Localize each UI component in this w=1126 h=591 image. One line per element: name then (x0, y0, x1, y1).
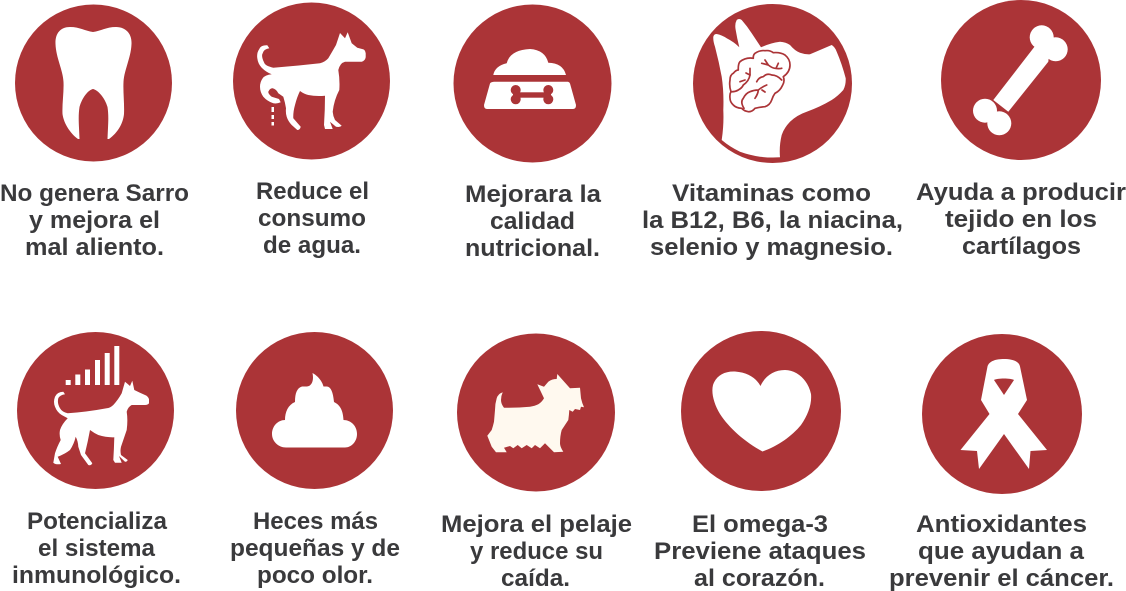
caption: tartar and breath: No genera Sarro (0, 180, 189, 207)
caption: heart health (654, 511, 866, 591)
icon: food bowl (454, 4, 612, 162)
caption: heart health: Previene ataques (654, 538, 866, 565)
caption: nutrition (465, 181, 601, 262)
caption: water consumption: Reduce el (256, 178, 369, 205)
caption: water consumption (256, 178, 369, 259)
caption: water consumption: de agua. (263, 232, 361, 259)
caption: water consumption: consumo (258, 205, 366, 232)
caption: immune system (12, 508, 181, 589)
caption: stool: poco olor. (257, 562, 373, 589)
caption: heart health: El omega-3 (692, 511, 828, 538)
icon: awareness ribbon (922, 334, 1082, 494)
caption: vitamins: selenio y magnesio. (650, 234, 893, 261)
caption: nutrition: calidad (490, 208, 575, 235)
caption: stool: Heces más (253, 508, 378, 535)
caption: cartilage: tejido en los (945, 206, 1097, 233)
icon: tooth (15, 4, 172, 162)
caption: antioxidants (889, 511, 1114, 591)
icon: dog urinating (233, 2, 390, 160)
panel: heart health (654, 331, 866, 591)
caption: immune system: Potencializa (27, 508, 167, 535)
icon: stool (236, 332, 393, 489)
caption: nutrition: Mejorara la (465, 181, 601, 208)
caption: tartar and breath: y mejora el (29, 207, 160, 234)
panel: water consumption (233, 2, 390, 259)
caption: antioxidants: que ayudan a (918, 538, 1084, 565)
icon: terrier (457, 334, 615, 492)
caption: stool: pequeñas y de (230, 535, 400, 562)
panel: stool (230, 332, 400, 589)
icon: heart (681, 331, 841, 491)
caption: stool (230, 508, 400, 589)
caption: cartilage: cartílagos (962, 233, 1081, 260)
caption: coat: Mejora el pelaje (441, 511, 632, 538)
caption: cartilage: Ayuda a producir (916, 179, 1126, 206)
caption: cartilage (916, 179, 1126, 260)
panel: cartilage (916, 0, 1126, 260)
icon: bone (941, 0, 1101, 160)
caption: coat: y reduce su (470, 538, 603, 565)
panel: vitamins (642, 4, 903, 261)
caption: antioxidants: Antioxidantes (916, 511, 1087, 538)
caption: tartar and breath (0, 180, 189, 261)
caption: vitamins: la B12, B6, la niacina, (642, 207, 903, 234)
caption: coat (441, 511, 632, 591)
icon: dog head with brain (693, 4, 852, 163)
caption: vitamins: Vitaminas como (672, 180, 871, 207)
panel: immune system (12, 332, 181, 589)
caption: immune system: el sistema (38, 535, 155, 562)
panel: tartar and breath (0, 4, 189, 261)
caption: immune system: inmunológico. (12, 562, 181, 589)
caption: vitamins (642, 180, 903, 261)
panel: antioxidants (889, 334, 1114, 591)
caption: nutrition: nutricional. (465, 235, 600, 262)
panel: nutrition (454, 4, 612, 262)
icon: dog with rising bars (17, 332, 174, 489)
caption: tartar and breath: mal aliento. (25, 234, 164, 261)
panel: coat (441, 334, 632, 591)
